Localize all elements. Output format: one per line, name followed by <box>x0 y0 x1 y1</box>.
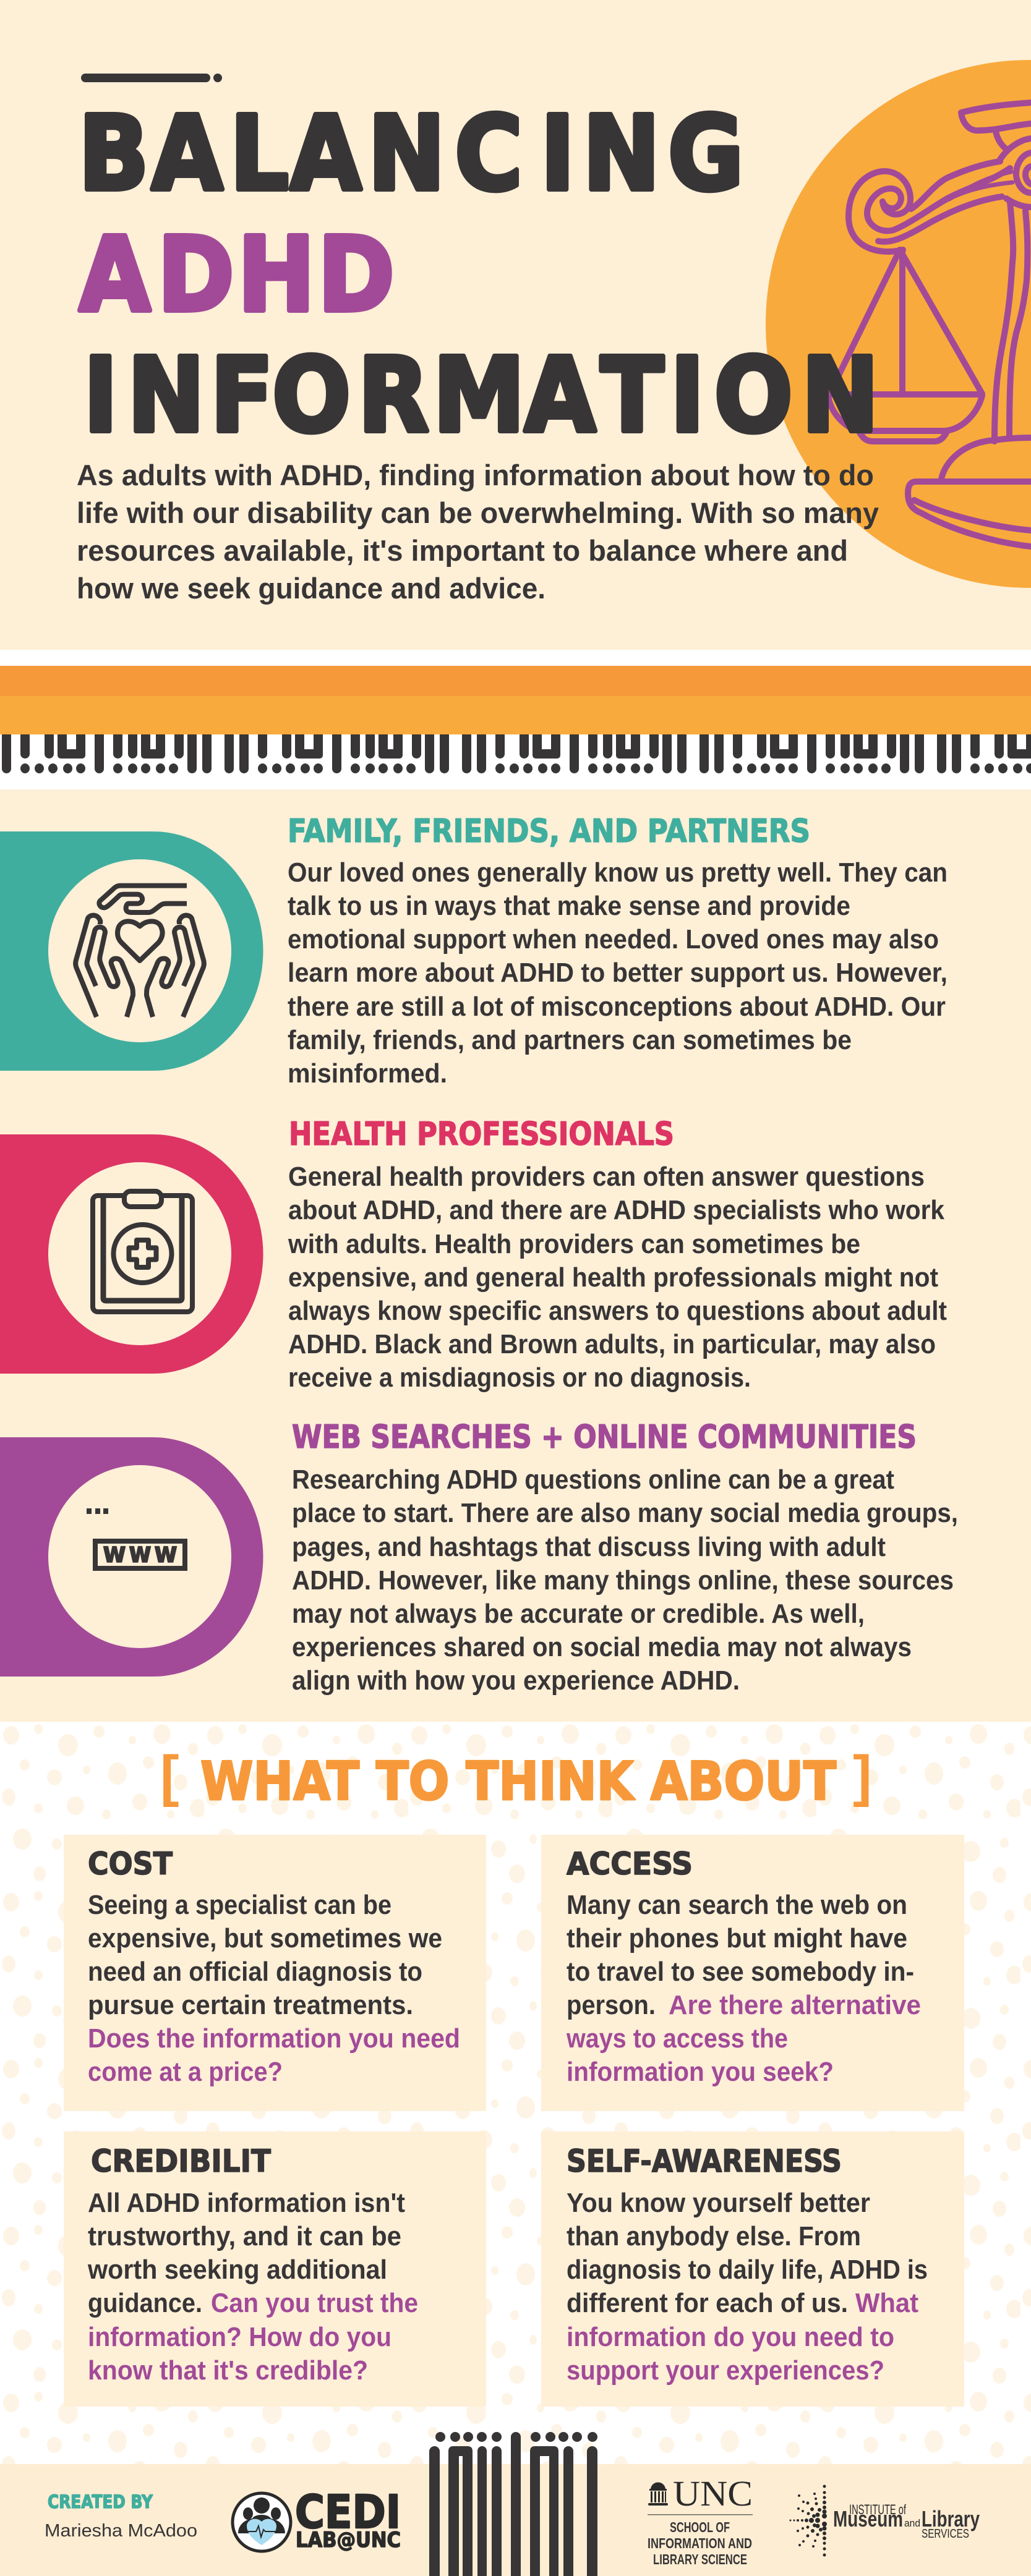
icon: www browser bar: w <box>103 1536 126 1569</box>
body text: place to start. There are also many social media groups, <box>292 1498 958 1528</box>
body text: learn more about ADHD to better support us. However, <box>288 958 948 988</box>
card: cost: pursue certain treatments. <box>88 1991 413 2020</box>
section heading: [ <box>160 1745 179 1808</box>
band: orange stripes and barcode pattern <box>0 650 1031 789</box>
logo: Institute of Museum and Library Services: Museum <box>833 2506 903 2531</box>
body text: with adults. Health providers can sometimes be <box>288 1230 860 1259</box>
body text: family, friends, and partners can sometimes be <box>288 1026 852 1055</box>
intro text: As adults with ADHD, finding information about how to do <box>77 459 874 492</box>
card: cost: come at a price? <box>88 2057 283 2087</box>
logo: UNC School of Information and Library Science: UNC <box>673 2473 753 2514</box>
card: access: information you seek? <box>567 2057 834 2087</box>
logo: CEDI Lab: CEDI <box>295 2486 401 2539</box>
card: cost: COST <box>88 1846 173 1882</box>
card: credibility: Can you trust the <box>211 2289 418 2318</box>
body text: ADHD. However, like many things online, these sources <box>292 1566 954 1596</box>
heading: HEALTH PROFESSIONALS <box>289 1116 674 1153</box>
icon: www browser bar <box>87 1508 185 1569</box>
heading: FAMILY, FRIENDS, AND PARTNERS <box>288 813 810 850</box>
section heading: ] <box>853 1745 872 1808</box>
credit <box>45 2491 197 2541</box>
logo: CEDI Lab <box>233 2486 401 2553</box>
card: credibility: CREDIBILIT <box>91 2143 271 2179</box>
icon: hands holding heart <box>75 886 204 1017</box>
body text: there are still a lot of misconceptions about ADHD. Our <box>288 992 946 1022</box>
card: access: Are there alternative <box>669 1991 921 2020</box>
card: self-awareness: What <box>855 2289 918 2318</box>
card: credibility: information? How do you <box>88 2323 391 2352</box>
panel: header <box>77 60 1031 605</box>
accent line <box>81 74 222 82</box>
intro text: resources available, it's important to balance where and <box>77 535 848 567</box>
body text: talk to us in ways that make sense and provide <box>288 891 850 921</box>
card: access: ACCESS <box>567 1846 693 1882</box>
purple tab with circle <box>0 1437 263 1677</box>
body text: about ADHD, and there are ADHD specialists who work <box>288 1196 945 1225</box>
credit: Mariesha McAdoo <box>45 2521 197 2541</box>
body text: expensive, and general health professionals might not <box>288 1263 938 1293</box>
barcode ornament <box>429 2432 597 2576</box>
logo: Institute of Museum and Library Services: INSTITUTE of <box>849 2502 907 2517</box>
card: self-awareness: information do you need to <box>567 2323 894 2352</box>
intro text <box>77 459 879 605</box>
panel: what to think about <box>0 1722 1031 2464</box>
card: access: ways to access the <box>566 2024 788 2054</box>
panel: health professionals <box>0 1116 947 1393</box>
card: self-awareness <box>541 2132 964 2407</box>
credit: CREATED BY <box>48 2491 153 2512</box>
card: self-awareness: You know yourself better <box>567 2188 870 2218</box>
card: self-awareness: diagnosis to daily life, ADHD is <box>567 2255 928 2285</box>
title: BALANCING <box>79 95 744 214</box>
card: credibility: guidance. <box>88 2289 202 2318</box>
body text: General health providers can often answer questions <box>288 1162 925 1192</box>
body text <box>292 1465 958 1696</box>
logo: UNC School of Information and Library Science: INFORMATION AND <box>648 2535 752 2551</box>
card: access: person. <box>567 1991 656 2020</box>
intro text: how we seek guidance and advice. <box>77 572 545 605</box>
body text: receive a misdiagnosis or no diagnosis. <box>288 1363 751 1393</box>
body text: always know specific answers to questions about adult <box>288 1296 947 1326</box>
card: self-awareness: SELF-AWARENESS <box>567 2143 842 2179</box>
icon: scales of justice <box>829 103 1031 546</box>
panel: footer <box>0 2432 1031 2576</box>
body text: align with how you experience ADHD. <box>292 1666 740 1696</box>
icon: www browser bar: w <box>154 1536 178 1569</box>
card: credibility: trustworthy, and it can be <box>88 2222 401 2251</box>
card: credibility <box>64 2132 486 2407</box>
body text <box>288 858 948 1089</box>
card: cost: Does the information you need <box>88 2024 460 2054</box>
heading: WEB SEARCHES + ONLINE COMMUNITIES <box>292 1419 917 1456</box>
body text: experiences shared on social media may not always <box>292 1633 912 1662</box>
card: self-awareness: than anybody else. From <box>567 2222 861 2251</box>
logo: Institute of Museum and Library Services: SERVICES <box>922 2527 969 2541</box>
title: ADHD <box>79 216 395 335</box>
card: access: their phones but might have <box>567 1924 907 1953</box>
logo: Institute of Museum and Library Services <box>789 2485 980 2557</box>
card: cost <box>64 1835 486 2111</box>
body text: may not always be accurate or credible. As well, <box>292 1599 865 1629</box>
card: cost: expensive, but sometimes we <box>88 1924 442 1953</box>
card: access <box>541 1835 964 2111</box>
body text: pages, and hashtags that discuss living with adult <box>292 1532 886 1562</box>
body text: misinformed. <box>288 1059 447 1089</box>
panel: web searches and online communities <box>0 1419 958 1696</box>
body text: emotional support when needed. Loved ones may also <box>288 925 939 954</box>
card: access: Many can search the web on <box>567 1890 907 1920</box>
logo: UNC School of Information and Library Science: SCHOOL OF <box>670 2519 730 2535</box>
card: credibility: All ADHD information isn't <box>88 2188 405 2218</box>
panel: family, friends, and partners <box>0 813 948 1089</box>
icon: medical clipboard <box>93 1191 192 1312</box>
body text <box>288 1162 947 1393</box>
card: cost: Seeing a specialist can be <box>88 1890 391 1920</box>
intro text: life with our disability can be overwhelming. With so many <box>77 497 879 530</box>
logo: Institute of Museum and Library Services: and <box>904 2517 920 2529</box>
section heading: WHAT TO THINK ABOUT <box>200 1751 836 1813</box>
card: access: to travel to see somebody in- <box>567 1957 914 1987</box>
logo: UNC School of Information and Library Science <box>648 2473 753 2567</box>
orange circle <box>766 60 1031 588</box>
pink tab with circle <box>0 1134 263 1374</box>
card: cost: need an official diagnosis to <box>88 1957 422 1987</box>
body text: ADHD. Black and Brown adults, in particular, may also <box>288 1330 936 1359</box>
logo: Institute of Museum and Library Services: Library <box>922 2506 980 2531</box>
card: self-awareness: different for each of us. <box>567 2289 848 2318</box>
logo: UNC School of Information and Library Science: LIBRARY SCIENCE <box>653 2551 747 2567</box>
card: credibility: worth seeking additional <box>87 2255 387 2285</box>
body text: Researching ADHD questions online can be a great <box>292 1465 894 1495</box>
card: self-awareness: support your experiences? <box>567 2356 884 2386</box>
title: INFORMATION <box>83 336 879 456</box>
body text: Our loved ones generally know us pretty well. They can <box>288 858 948 888</box>
title <box>79 95 879 456</box>
icon: www browser bar: w <box>129 1536 152 1569</box>
teal tab with circle <box>0 831 263 1071</box>
logo: CEDI Lab: LAB@UNC <box>296 2528 401 2553</box>
card: credibility: know that it's credible? <box>88 2356 368 2386</box>
